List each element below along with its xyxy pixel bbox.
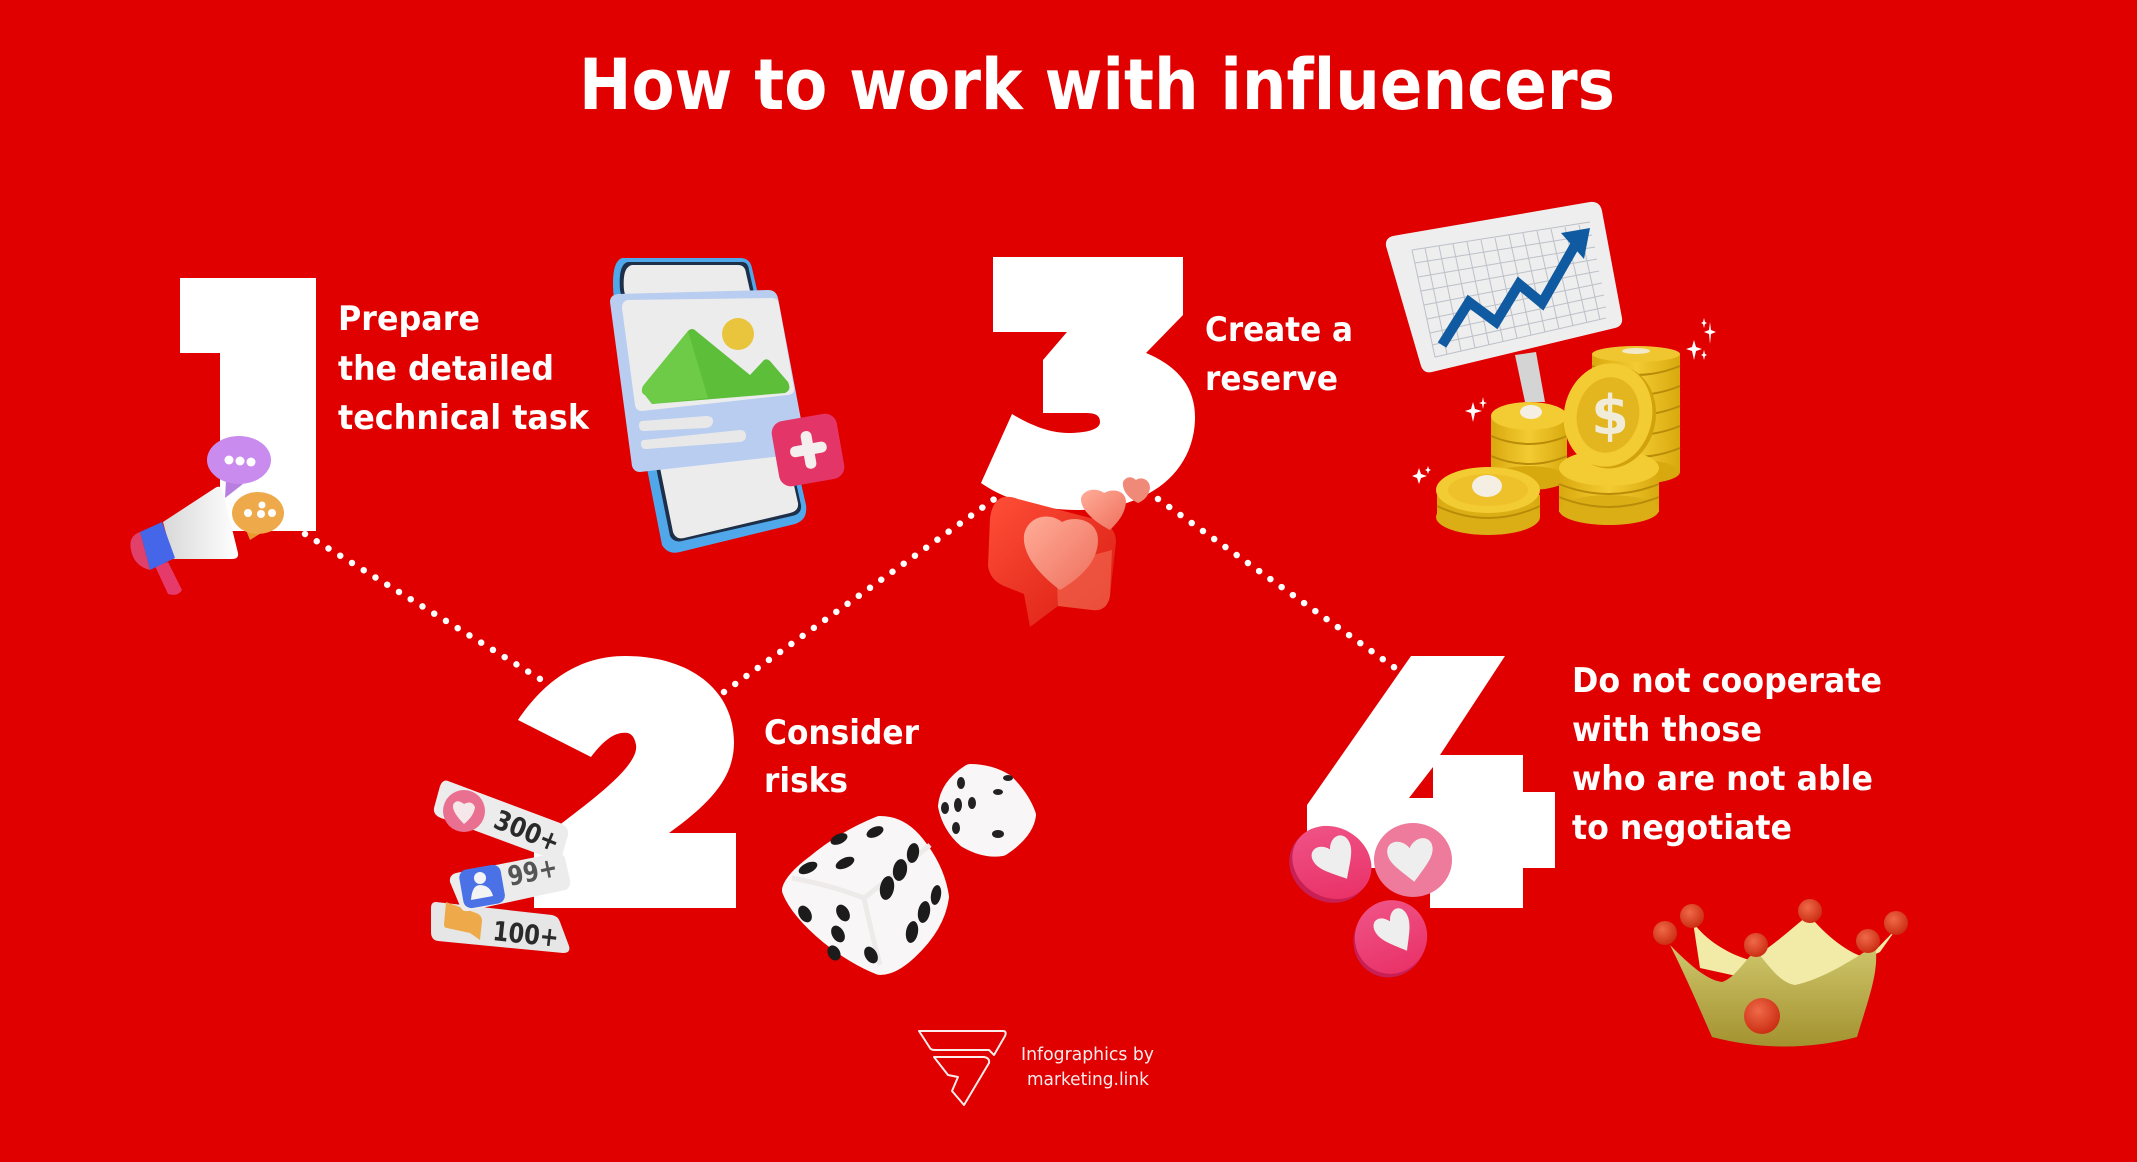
coin 1 bbox=[1275, 811, 1385, 918]
icon: crown bbox=[1653, 899, 1908, 1046]
numeral 3 bbox=[981, 257, 1195, 510]
coin 3 bbox=[1341, 888, 1439, 989]
tiny heart bbox=[1123, 477, 1150, 503]
icon: phone with image card bbox=[610, 258, 846, 553]
plus tile bbox=[770, 412, 846, 488]
left stack bbox=[1491, 402, 1567, 490]
icon: social counters cards bbox=[431, 781, 570, 954]
sun bbox=[722, 318, 754, 350]
step 3 text: Create a bbox=[1205, 310, 1353, 350]
small die bbox=[941, 772, 1028, 849]
sign pole bbox=[1515, 352, 1545, 402]
attribution text: marketing.link bbox=[1027, 1069, 1150, 1090]
crown inner back bbox=[1693, 915, 1897, 990]
title: How to work with influencers bbox=[579, 44, 1615, 126]
99+ card: 99+ bbox=[505, 852, 560, 893]
icon: heart coins bbox=[1275, 811, 1452, 989]
small heart bbox=[1081, 490, 1126, 530]
purple bubble bbox=[207, 436, 271, 498]
orange bubble bbox=[232, 492, 284, 540]
phone body bbox=[613, 258, 806, 553]
caption bars bbox=[639, 416, 713, 431]
chart grid bbox=[1412, 222, 1606, 357]
step 4 text: with those bbox=[1572, 710, 1762, 750]
step 1 text: technical task bbox=[338, 398, 590, 438]
dotted connector: step 1 to 2 bbox=[305, 534, 545, 682]
rising arrow bbox=[1442, 228, 1590, 345]
step 3 text: reserve bbox=[1205, 359, 1338, 399]
dotted connector: step 3 to 4 bbox=[1158, 499, 1398, 670]
crown front bbox=[1670, 945, 1876, 1046]
dollar coin bbox=[1554, 355, 1666, 477]
numeral 4 bbox=[1307, 656, 1555, 908]
front low stack bbox=[1436, 467, 1540, 535]
100+ card bbox=[431, 902, 569, 954]
step 1 text: the detailed bbox=[338, 349, 554, 389]
back tall stack bbox=[1592, 346, 1680, 484]
icon: heart speech bubble bbox=[988, 477, 1150, 627]
step 2 text bbox=[764, 713, 919, 801]
100+ card: 100+ bbox=[491, 916, 560, 954]
step 4 text: Do not cooperate bbox=[1572, 661, 1882, 701]
mountain picture bbox=[642, 329, 789, 404]
99+ card bbox=[450, 852, 570, 911]
300+ card: 300+ bbox=[489, 805, 564, 859]
icon: megaphone with chat bubbles bbox=[130, 436, 284, 595]
300+ card bbox=[434, 781, 568, 860]
step 2 text: Consider bbox=[764, 713, 919, 753]
dollar sign: $ bbox=[1591, 384, 1629, 447]
icon: coin stacks with sparkles bbox=[1412, 318, 1716, 535]
step 2 text: risks bbox=[764, 761, 848, 801]
sparkles bbox=[1412, 318, 1716, 484]
icon: dice bbox=[792, 772, 1028, 966]
large die bbox=[792, 824, 943, 966]
step 4 text: to negotiate bbox=[1572, 808, 1792, 848]
step 4 text: who are not able bbox=[1572, 759, 1873, 799]
image card bbox=[610, 290, 806, 472]
crown jewels bbox=[1653, 899, 1908, 1034]
step 1 text: Prepare bbox=[338, 299, 480, 339]
dotted connector: step 2 to 3 bbox=[724, 495, 1000, 692]
large heart bbox=[1024, 516, 1098, 590]
attribution text: Infographics by bbox=[1021, 1044, 1154, 1065]
numeral 2 bbox=[518, 656, 736, 908]
step 1 text bbox=[338, 299, 590, 438]
icon: growth chart sign bbox=[1386, 202, 1622, 402]
front right stack bbox=[1559, 450, 1659, 525]
step 4 text bbox=[1572, 661, 1882, 848]
logo mark bbox=[919, 1031, 1006, 1105]
phone screen bbox=[620, 262, 801, 541]
megaphone bbox=[130, 487, 238, 595]
attribution text bbox=[1021, 1044, 1154, 1090]
sign board bbox=[1386, 202, 1622, 372]
numeral 1 bbox=[180, 278, 316, 531]
coin 2 bbox=[1374, 823, 1452, 897]
step 3 text bbox=[1205, 310, 1353, 399]
